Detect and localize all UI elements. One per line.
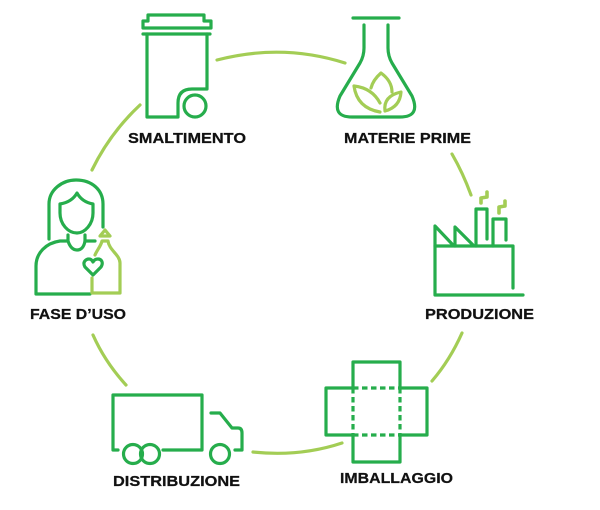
icon: delivery truck [113,395,242,464]
label: fase d'uso: FASE D’USO [30,307,126,323]
icon: factory [435,192,523,295]
label: produzione: PRODUZIONE [425,307,534,323]
icon: wheelie bin [143,15,211,117]
icon: box net [326,362,427,462]
label: smaltimento: SMALTIMENTO [128,131,246,147]
label: imballaggio: IMBALLAGGIO [340,471,453,487]
label: distribuzione: DISTRIBUZIONE [113,474,240,490]
label: materie prime: MATERIE PRIME [344,131,471,147]
icon: flask with leaves [337,18,415,117]
icon: person with bottle [36,180,120,294]
cycle connector arcs [92,52,471,453]
